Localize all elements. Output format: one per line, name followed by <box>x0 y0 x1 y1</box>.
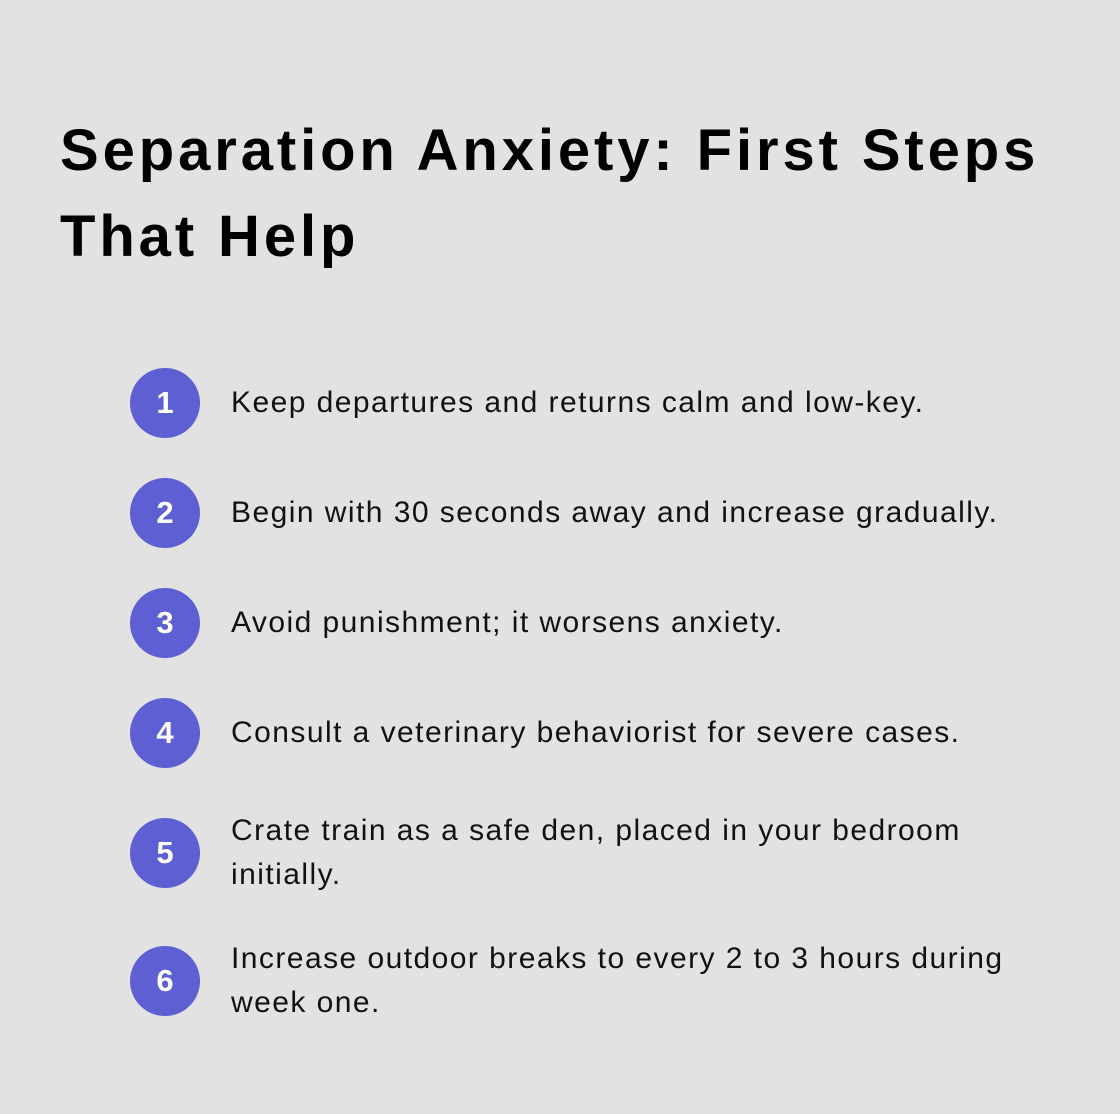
step 4 <box>130 698 960 768</box>
step 5: 5 <box>156 835 174 870</box>
step 2: Begin with 30 seconds away and increase gradually. <box>231 496 998 529</box>
step 4: 4 <box>156 715 174 750</box>
title: That Help <box>60 204 359 269</box>
step 3: Avoid punishment; it worsens anxiety. <box>231 606 784 639</box>
step 3: 3 <box>156 605 174 640</box>
step 6 <box>130 942 1003 1019</box>
step 4: Consult a veterinary behaviorist for severe cases. <box>231 716 960 749</box>
step 6: Increase outdoor breaks to every 2 to 3 hours during <box>231 942 1003 975</box>
step 3 <box>130 588 784 658</box>
step 5: Crate train as a safe den, placed in your bedroom <box>231 814 961 847</box>
title <box>60 118 1039 269</box>
step 5 <box>130 814 961 891</box>
step 5: initially. <box>231 858 342 891</box>
title: Separation Anxiety: First Steps <box>60 118 1039 183</box>
step 1: 1 <box>156 385 174 420</box>
step 2 <box>130 478 998 548</box>
step 1: Keep departures and returns calm and low-key. <box>231 386 924 419</box>
step 6: week one. <box>231 986 381 1019</box>
step 1 <box>130 368 924 438</box>
step 6: 6 <box>156 963 174 998</box>
step 2: 2 <box>156 495 174 530</box>
